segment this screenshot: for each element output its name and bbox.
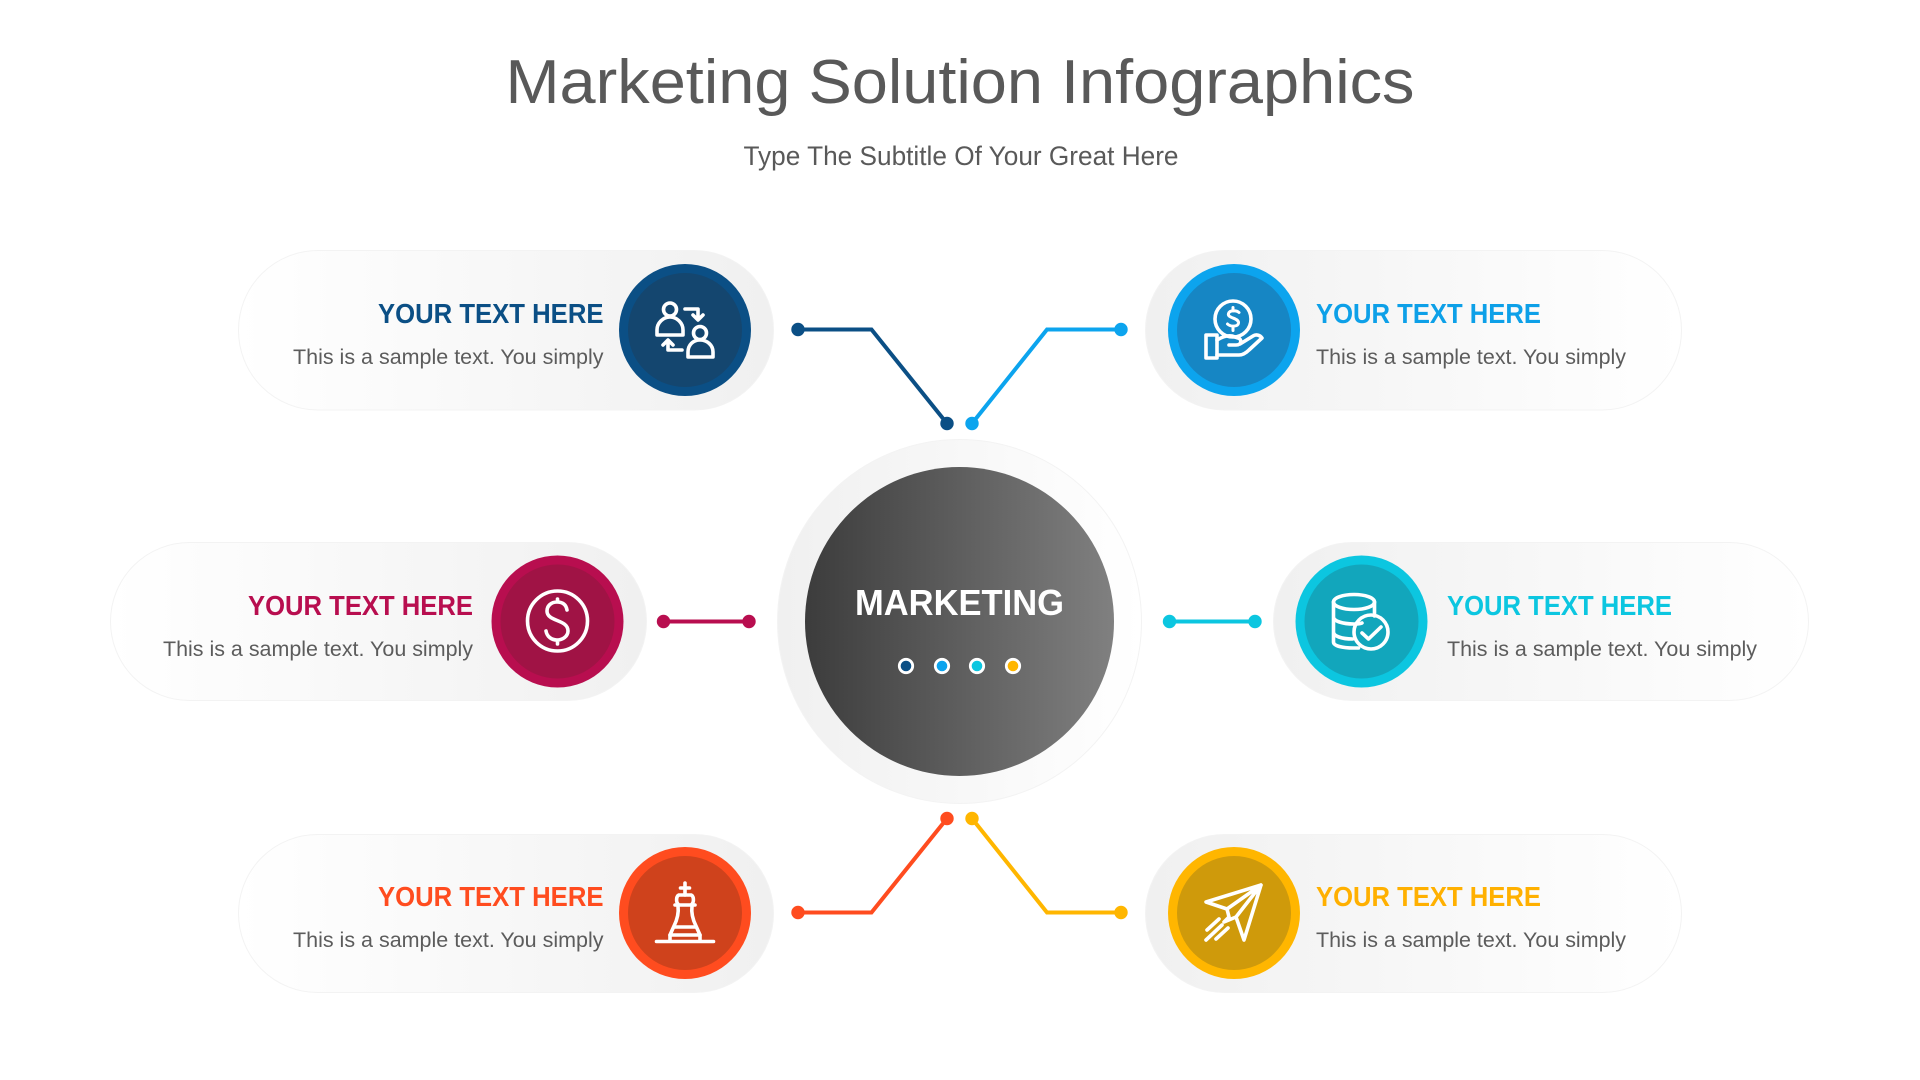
connector: top right <box>965 323 1128 430</box>
heading: YOUR TEXT HERE <box>1447 590 1672 621</box>
center label: MARKETING <box>855 582 1064 623</box>
heading: YOUR TEXT HERE <box>378 298 604 329</box>
icon: chess king <box>619 847 751 979</box>
subtitle: Type The Subtitle Of Your Great Here <box>744 141 1178 171</box>
connector: middle right <box>1163 615 1262 628</box>
panel: bottom right item <box>1146 834 1682 992</box>
icon: dollar circle <box>492 556 624 688</box>
icon: database check <box>1296 556 1428 688</box>
connector: top left <box>791 323 954 430</box>
pill background <box>1146 250 1682 410</box>
connector: bottom right <box>965 812 1128 919</box>
icon: paper plane <box>1168 847 1300 979</box>
heading: YOUR TEXT HERE <box>1316 881 1541 912</box>
panel: top right item <box>1146 250 1682 410</box>
icon: people exchange <box>619 264 751 396</box>
panel: top left item <box>238 250 774 410</box>
body text: This is a sample text. You simply <box>163 637 473 661</box>
panel: middle left item <box>110 542 646 700</box>
heading: YOUR TEXT HERE <box>1316 298 1541 329</box>
body text: This is a sample text. You simply <box>1447 637 1757 661</box>
body text: This is a sample text. You simply <box>1316 345 1626 369</box>
pill background <box>238 250 774 410</box>
heading: YOUR TEXT HERE <box>378 881 604 912</box>
panel: bottom left item <box>238 834 774 992</box>
connector: middle left <box>657 615 756 628</box>
panel: middle right item <box>1274 542 1808 700</box>
body text: This is a sample text. You simply <box>293 928 604 952</box>
title: Marketing Solution Infographics <box>506 48 1414 117</box>
pill background <box>238 834 774 992</box>
icon: coin in hand <box>1168 264 1300 396</box>
heading: YOUR TEXT HERE <box>248 590 473 621</box>
connector: bottom left <box>791 812 954 919</box>
center circle <box>778 440 1142 804</box>
body text: This is a sample text. You simply <box>293 345 604 369</box>
body text: This is a sample text. You simply <box>1316 928 1626 952</box>
status dots <box>899 659 1020 673</box>
pill background <box>1146 834 1682 992</box>
pill background <box>1274 542 1808 700</box>
pill background <box>110 542 646 700</box>
